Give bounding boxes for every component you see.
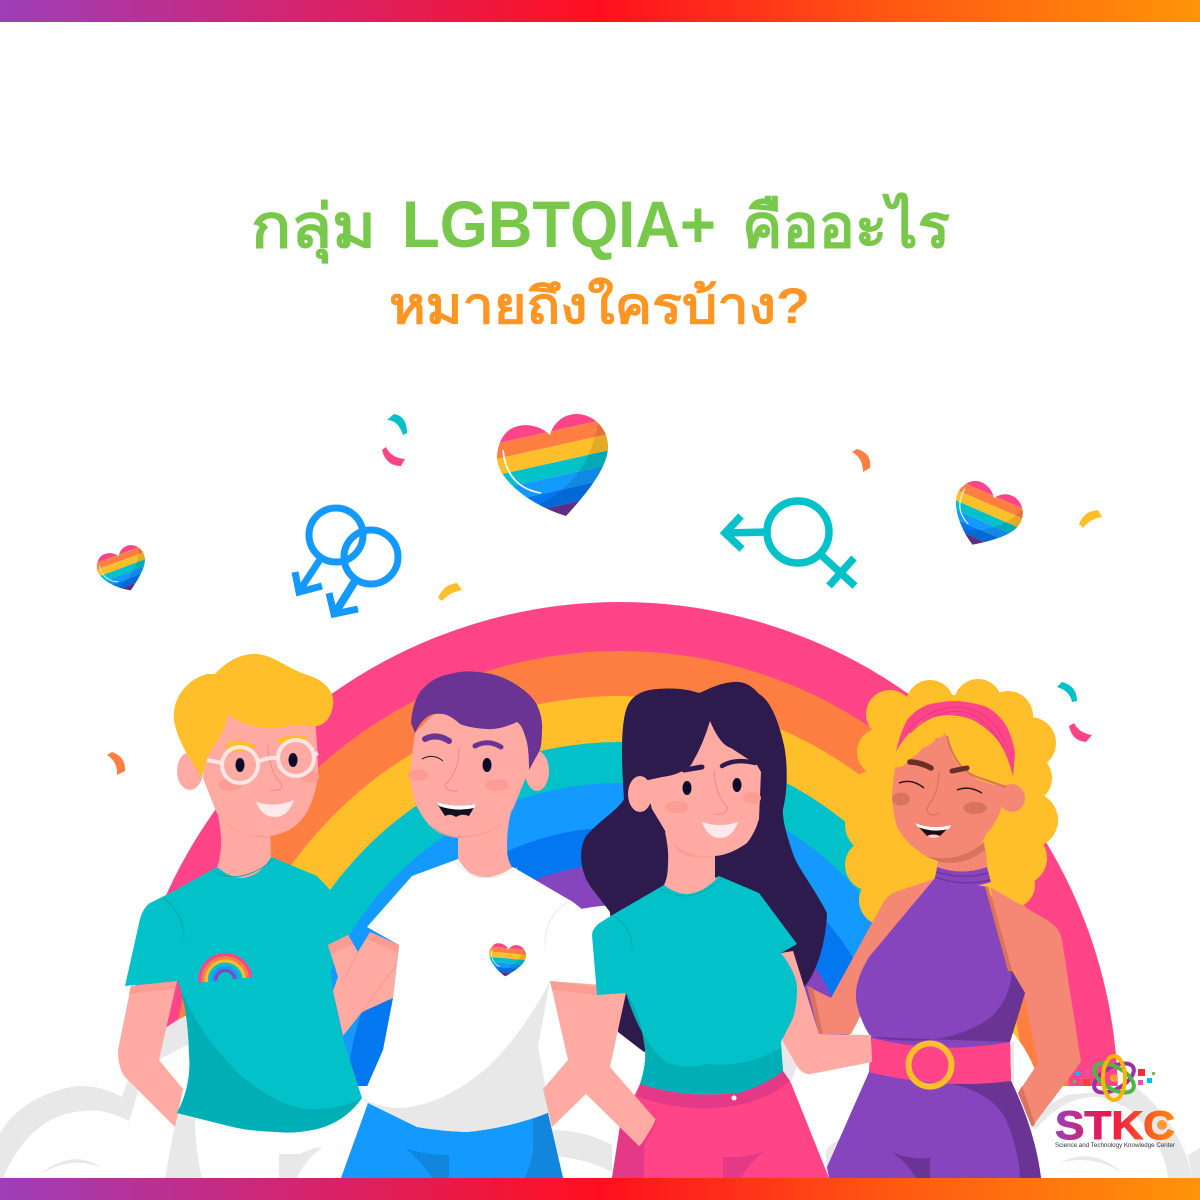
ear and neck (177, 752, 203, 790)
white t-shirt (362, 859, 603, 1132)
curly hair (845, 679, 1058, 926)
person: man with purple hair and white shirt (328, 671, 603, 1178)
ear and neck (525, 751, 549, 791)
heading line 1: LGBTQIA+ (402, 187, 716, 261)
person: blonde woman with purple dress (807, 679, 1081, 1178)
arm around neighbour (328, 932, 399, 1036)
arms (807, 878, 1081, 1127)
glasses and eyes (207, 735, 319, 817)
icon: atom (1089, 1056, 1139, 1100)
heading line 1: คืออะไร (742, 191, 950, 260)
clouds (0, 1000, 1200, 1178)
logo dot (1157, 1120, 1167, 1130)
belt with ring (869, 1038, 1011, 1086)
facial features (665, 761, 761, 838)
dress (827, 867, 1041, 1178)
person: man with blond hair and glasses (118, 654, 368, 1178)
blue trousers (341, 1103, 563, 1178)
rainbow (122, 602, 1118, 1100)
bottom gradient bar (0, 1178, 1200, 1200)
face (410, 705, 532, 837)
icon: rainbow heart right (904, 433, 1068, 595)
icon: heart on shirt (467, 920, 547, 997)
icon: double male symbol (295, 508, 398, 614)
top gradient bar (0, 0, 1200, 22)
long dark hair (581, 682, 827, 1052)
icon: small rainbow heart left (74, 523, 171, 613)
hair (174, 654, 333, 778)
wordmark: STKC (1055, 1104, 1175, 1148)
facial features (892, 762, 987, 838)
title (251, 187, 950, 334)
neck and face (892, 733, 1025, 880)
heading line 2: หมายถึงใครบ้าง? (389, 277, 810, 334)
icon: large rainbow heart (456, 373, 653, 552)
headband (896, 701, 1015, 777)
badge: rainbow on shirt (197, 952, 251, 983)
ear and neck (628, 776, 652, 812)
teal t-shirt (125, 857, 362, 1133)
right arm and hand (781, 951, 872, 1074)
facial features (408, 736, 509, 817)
face (644, 721, 761, 856)
heading line 1 (251, 187, 950, 264)
left arm to pocket (543, 981, 656, 1155)
pixel squares (1073, 1069, 1155, 1086)
white trousers (165, 1098, 368, 1178)
confetti (107, 414, 1102, 775)
logo: STKC (1055, 1056, 1176, 1149)
person: woman with dark hair (543, 682, 872, 1178)
left arm (118, 981, 183, 1127)
pink trousers (612, 1071, 829, 1178)
hair (411, 671, 542, 770)
icon: intersex gender symbol (724, 501, 855, 586)
face (203, 700, 318, 837)
tagline: Science and Technology Knowledge Center (1055, 1142, 1176, 1149)
heading line 1: กลุ่ม (251, 193, 376, 264)
teal t-shirt (592, 876, 797, 1094)
